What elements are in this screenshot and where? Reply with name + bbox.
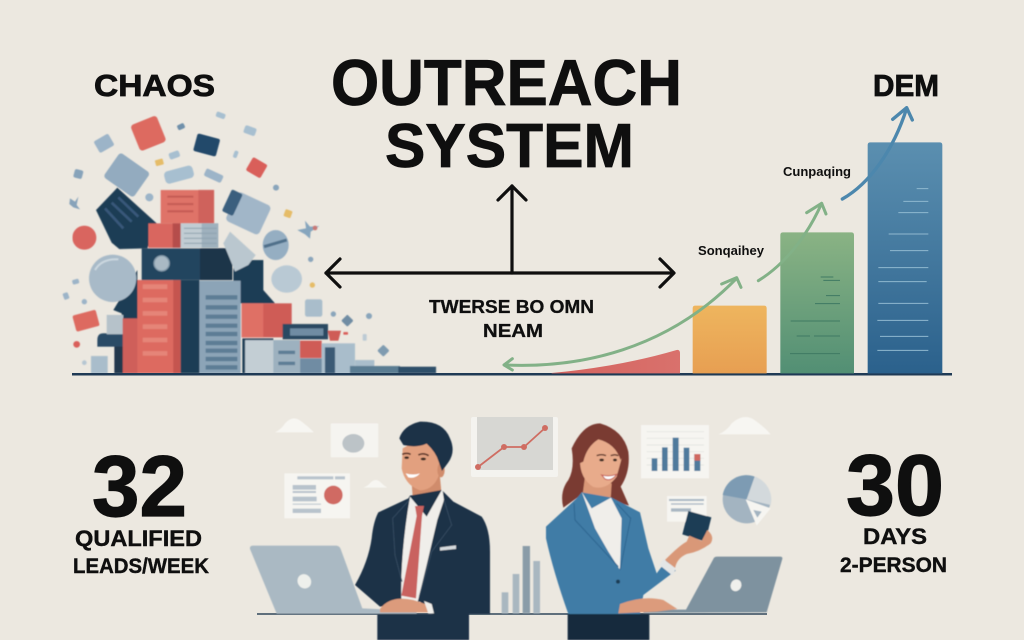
dark tilted device bbox=[96, 188, 157, 249]
caption: NEAM bbox=[483, 321, 543, 341]
jacket bbox=[355, 490, 490, 614]
caption bbox=[429, 297, 594, 341]
green bar bbox=[780, 232, 854, 373]
heading: chaos: CHAOS bbox=[94, 68, 215, 103]
flying debris bbox=[62, 111, 389, 365]
neck bbox=[412, 470, 442, 517]
lapels bbox=[393, 500, 452, 597]
stat: 30 days bbox=[840, 438, 947, 577]
laptop bbox=[643, 557, 782, 613]
head bbox=[402, 435, 444, 490]
shirt bbox=[582, 492, 622, 570]
tall red box bbox=[137, 280, 181, 373]
small bars bbox=[502, 546, 540, 613]
hair bbox=[399, 422, 453, 471]
disc bbox=[271, 265, 302, 293]
cuff raised bbox=[659, 559, 676, 576]
illustration: chaos pile bbox=[62, 111, 436, 373]
card: globe bbox=[331, 423, 378, 457]
shirt bbox=[401, 489, 444, 603]
stat: 32 qualified leads bbox=[73, 439, 209, 578]
cloud small bbox=[363, 480, 387, 488]
heading: dem: DEM bbox=[873, 68, 939, 103]
red ball bbox=[72, 226, 96, 250]
stat: 32 qualified leads: LEADS/WEEK bbox=[73, 555, 209, 578]
ear bbox=[437, 463, 445, 477]
dark backing shapes bbox=[113, 260, 275, 373]
red box middle bbox=[148, 223, 181, 248]
label: upper step: Cunpaqing bbox=[783, 164, 851, 179]
hands bbox=[380, 599, 428, 612]
raised hand bbox=[665, 530, 712, 568]
low boxes bbox=[242, 303, 436, 373]
label: lower step: Sonqaihey bbox=[698, 244, 764, 258]
head bbox=[580, 438, 622, 488]
pie chart bbox=[723, 475, 771, 526]
button bbox=[616, 580, 620, 584]
title: OUTREACH bbox=[331, 46, 682, 119]
title: SYSTEM bbox=[385, 112, 634, 181]
laptop bbox=[250, 546, 417, 614]
red wedge bbox=[552, 350, 680, 373]
pedestal bbox=[377, 614, 469, 640]
cloud left bbox=[275, 418, 314, 432]
cuff bbox=[424, 601, 434, 613]
orange bar bbox=[693, 306, 767, 373]
stat: 32 qualified leads: QUALIFIED bbox=[75, 526, 202, 551]
grey box bbox=[181, 223, 218, 248]
face details bbox=[597, 455, 618, 480]
blue arrow bbox=[842, 108, 912, 199]
big sphere bbox=[89, 255, 136, 302]
chart: growth bars bbox=[504, 108, 942, 373]
tie bbox=[401, 506, 424, 598]
card: bar chart bbox=[641, 425, 709, 478]
desk line bbox=[257, 613, 767, 615]
card: document with seal bbox=[284, 473, 350, 518]
neck bbox=[583, 477, 612, 508]
tilted box bbox=[222, 189, 272, 236]
dark column bbox=[181, 280, 199, 373]
lapels bbox=[574, 503, 631, 570]
baseline bbox=[72, 373, 952, 376]
cloud right bbox=[718, 417, 771, 434]
dark top box bbox=[142, 248, 232, 280]
pedestal bbox=[568, 614, 649, 640]
capsule bbox=[263, 230, 289, 260]
person: woman bbox=[502, 417, 782, 640]
jacket bbox=[546, 492, 676, 614]
server tower bbox=[199, 281, 241, 373]
phone bbox=[682, 511, 711, 542]
green arrow: mid bbox=[758, 203, 826, 281]
blue bar bbox=[868, 142, 942, 373]
stat: 30 days: DAYS bbox=[863, 524, 927, 549]
stat: 32 qualified leads: 32 bbox=[92, 439, 187, 535]
stat: 30 days: 30 bbox=[846, 438, 944, 534]
green arrow: low bbox=[504, 278, 741, 370]
arrows: central cross bbox=[326, 186, 674, 287]
typing hand bbox=[618, 598, 677, 613]
card: note bbox=[667, 496, 707, 522]
hair back bbox=[562, 423, 629, 508]
hair front bbox=[577, 433, 623, 464]
face details bbox=[402, 453, 429, 478]
person: man bbox=[250, 418, 490, 640]
red box top bbox=[161, 190, 214, 223]
stat: 30 days: 2-PERSON bbox=[840, 554, 947, 577]
left small stack bbox=[91, 315, 138, 373]
caption: TWERSE BO OMN bbox=[429, 297, 594, 317]
title bbox=[331, 46, 682, 181]
camera bbox=[223, 232, 256, 272]
line chart card bbox=[471, 417, 558, 477]
pocket square bbox=[440, 545, 456, 551]
